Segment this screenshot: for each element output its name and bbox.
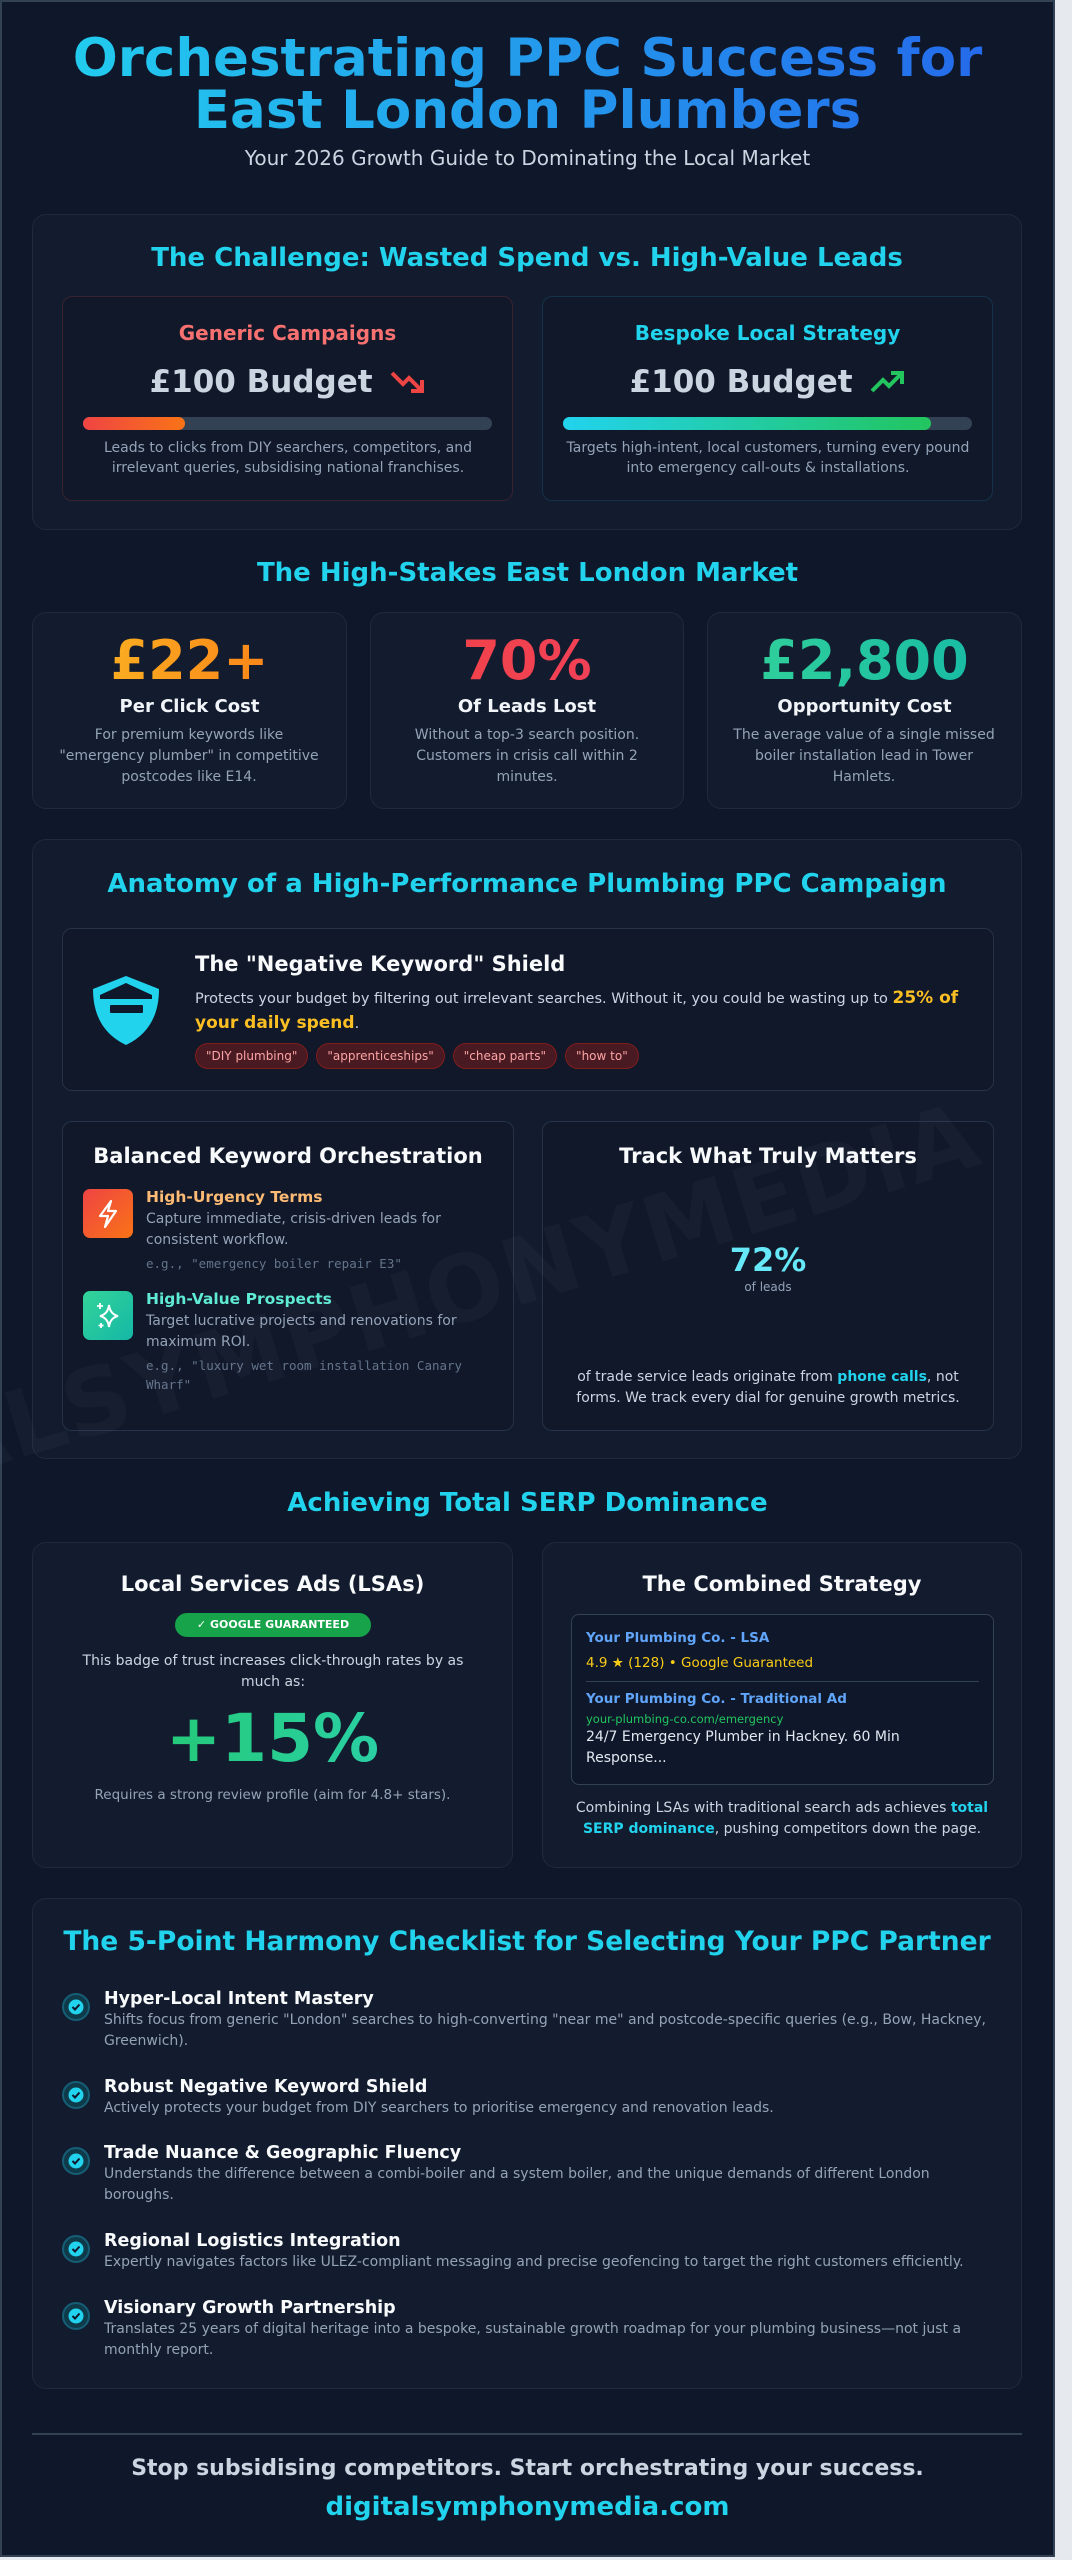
subtitle: Your 2026 Growth Guide to Dominating the Local Market xyxy=(245,146,810,170)
title: East London Plumbers xyxy=(194,80,861,141)
item 3 xyxy=(62,2143,930,2203)
item 1: Shifts focus from generic "London" searches to high-converting "near me" and postcode-specific queries (e.g., Bow, Hackney, Greenwich). xyxy=(104,2012,986,2049)
item 4 xyxy=(62,2231,964,2270)
stat card: leads lost: Of Leads Lost xyxy=(458,696,596,717)
item 1: Hyper-Local Intent Mastery xyxy=(104,1989,374,2009)
heading: market: The High-Stakes East London Market xyxy=(257,558,798,588)
description: Combining LSAs with traditional search ads achieves total SERP dominance, pushing competitors down the page. xyxy=(576,1800,988,1837)
mock SERP: your-plumbing-co.com/emergency xyxy=(586,1712,783,1726)
footer URL: digitalsymphonymedia.com xyxy=(326,2492,729,2522)
icon: shield xyxy=(93,976,159,1045)
card title: The Combined Strategy xyxy=(642,1572,922,1596)
item 3: Understands the difference between a combi-boiler and a system boiler, and the unique demands of different London boroughs. xyxy=(104,2166,930,2203)
description: Targets high-intent, local customers, turning every pound into emergency call-outs & installations. xyxy=(567,440,969,476)
stat card: CPC: £22+ xyxy=(111,629,268,692)
item 5: Translates 25 years of digital heritage into a bespoke, sustainable growth roadmap for your plumbing business—not just a monthly report. xyxy=(104,2321,961,2358)
footer CTA: Stop subsidising competitors. Start orchestrating your success. xyxy=(131,2456,924,2481)
card: generic campaigns xyxy=(62,296,513,501)
item: high urgency: Capture immediate, crisis-driven leads for consistent workflow. xyxy=(146,1211,441,1248)
item 2 xyxy=(62,2077,774,2116)
heading: challenge: The Challenge: Wasted Spend vs. High-Value Leads xyxy=(151,243,903,273)
icon: sparkle xyxy=(83,1291,133,1340)
panel: anatomy xyxy=(32,839,1022,1459)
mock SERP: 4.9 ★ (128) • Google Guaranteed xyxy=(586,1655,813,1671)
item 5: Visionary Growth Partnership xyxy=(104,2298,396,2318)
heading: SERP: Achieving Total SERP Dominance xyxy=(287,1488,768,1518)
stat card: leads lost: Without a top-3 search position. Customers in crisis call within 2 minutes. xyxy=(415,727,639,785)
heading: anatomy: Anatomy of a High-Performance Plumbing PPC Campaign xyxy=(107,869,947,899)
heading: checklist: The 5-Point Harmony Checklist for Selecting Your PPC Partner xyxy=(63,1926,991,1957)
note: Requires a strong review profile (aim for 4.8+ stars). xyxy=(95,1787,450,1803)
budget with down icon: £100 Budget xyxy=(150,364,373,400)
traditional ad: Your Plumbing Co. - Traditional Ad xyxy=(586,1691,847,1707)
card title: Balanced Keyword Orchestration xyxy=(93,1144,483,1168)
card title: Bespoke Local Strategy xyxy=(635,321,900,345)
description: Leads to clicks from DIY searchers, competitors, and irrelevant queries, subsidising national franchises. xyxy=(104,440,472,476)
tags xyxy=(195,1043,639,1069)
badge: ✓ GOOGLE GUARANTEED xyxy=(197,1618,349,1631)
tags: "how to" xyxy=(576,1049,628,1063)
shield description: your daily spend. xyxy=(195,1013,359,1033)
item 1 xyxy=(62,1989,986,2049)
card: LSAs xyxy=(32,1542,513,1868)
item: high urgency: High-Urgency Terms xyxy=(146,1188,322,1206)
mock SERP: 24/7 Emergency Plumber in Hackney. 60 Min Response... xyxy=(586,1729,900,1766)
budget with up icon: £100 Budget xyxy=(630,364,853,400)
item 4: Regional Logistics Integration xyxy=(104,2231,401,2251)
bar xyxy=(563,417,972,430)
item: high value: High-Value Prospects xyxy=(146,1290,332,1308)
panel: checklist xyxy=(32,1898,1022,2389)
icon: lightning xyxy=(83,1189,133,1238)
item 5 xyxy=(62,2298,961,2358)
stat card: CPC: For premium keywords like "emergency plumber" in competitive postcodes like E14. xyxy=(59,727,319,785)
shield description: Protects your budget by filtering out irrelevant searches. Without it, you could be wasting up to 25% of xyxy=(195,988,958,1008)
card: combined strategy xyxy=(542,1542,1022,1868)
card: keyword orchestration xyxy=(62,1121,514,1431)
stat card: CPC xyxy=(32,612,347,809)
title: Orchestrating PPC Success for xyxy=(73,28,982,89)
card title: Track What Truly Matters xyxy=(619,1144,917,1168)
item 2: Robust Negative Keyword Shield xyxy=(104,2077,427,2097)
card: bespoke strategy xyxy=(542,296,993,501)
stat card: CPC: Per Click Cost xyxy=(120,696,259,717)
card title: Generic Campaigns xyxy=(179,321,396,345)
panel: challenge xyxy=(32,214,1022,530)
LSA result: Your Plumbing Co. - LSA xyxy=(586,1630,769,1646)
stat label: of leads xyxy=(744,1280,792,1294)
tags: "DIY plumbing" xyxy=(206,1049,297,1063)
card: track what matters xyxy=(542,1121,994,1431)
description: of trade service leads originate from phone calls, not forms. We track every dial for genuine growth metrics. xyxy=(576,1369,960,1406)
stat +15% xyxy=(33,1701,512,1777)
item: high value: e.g., "luxury wet room installation Canary Wharf" xyxy=(146,1358,462,1392)
item: high urgency: e.g., "emergency boiler repair E3" xyxy=(146,1256,402,1271)
stat card: leads lost xyxy=(370,612,684,809)
card: negative keyword shield xyxy=(62,928,994,1091)
tags: "apprenticeships" xyxy=(327,1049,434,1063)
stat card: leads lost: 70% xyxy=(462,629,592,692)
tags: "cheap parts" xyxy=(464,1049,546,1063)
item: high value xyxy=(146,1290,462,1392)
mock SERP xyxy=(571,1614,994,1785)
shield description xyxy=(195,988,958,1033)
badge xyxy=(175,1613,371,1637)
stat card: opportunity xyxy=(707,612,1022,809)
card title: Local Services Ads (LSAs) xyxy=(121,1572,424,1596)
stat 72%: 72% xyxy=(730,1241,806,1279)
title xyxy=(0,33,1055,137)
description: This badge of trust increases click-through rates by as much as: xyxy=(83,1653,463,1690)
stat card: opportunity: Opportunity Cost xyxy=(777,696,952,717)
item 2: Actively protects your budget from DIY searchers to prioritise emergency and renovation leads. xyxy=(104,2100,774,2116)
item: high value: Target lucrative projects and renovations for maximum ROI. xyxy=(146,1313,457,1350)
shield title: The "Negative Keyword" Shield xyxy=(195,952,565,976)
stat card: opportunity: The average value of a single missed boiler installation lead in Tower Hamlets. xyxy=(733,727,995,785)
bar xyxy=(83,417,492,430)
item 4: Expertly navigates factors like ULEZ-compliant messaging and precise geofencing to target the right customers efficiently. xyxy=(104,2254,964,2270)
item: high urgency xyxy=(146,1188,441,1271)
stat card: opportunity: £2,800 xyxy=(760,629,969,692)
item 3: Trade Nuance & Geographic Fluency xyxy=(104,2143,461,2163)
stat +15%: +15% xyxy=(166,1700,379,1777)
